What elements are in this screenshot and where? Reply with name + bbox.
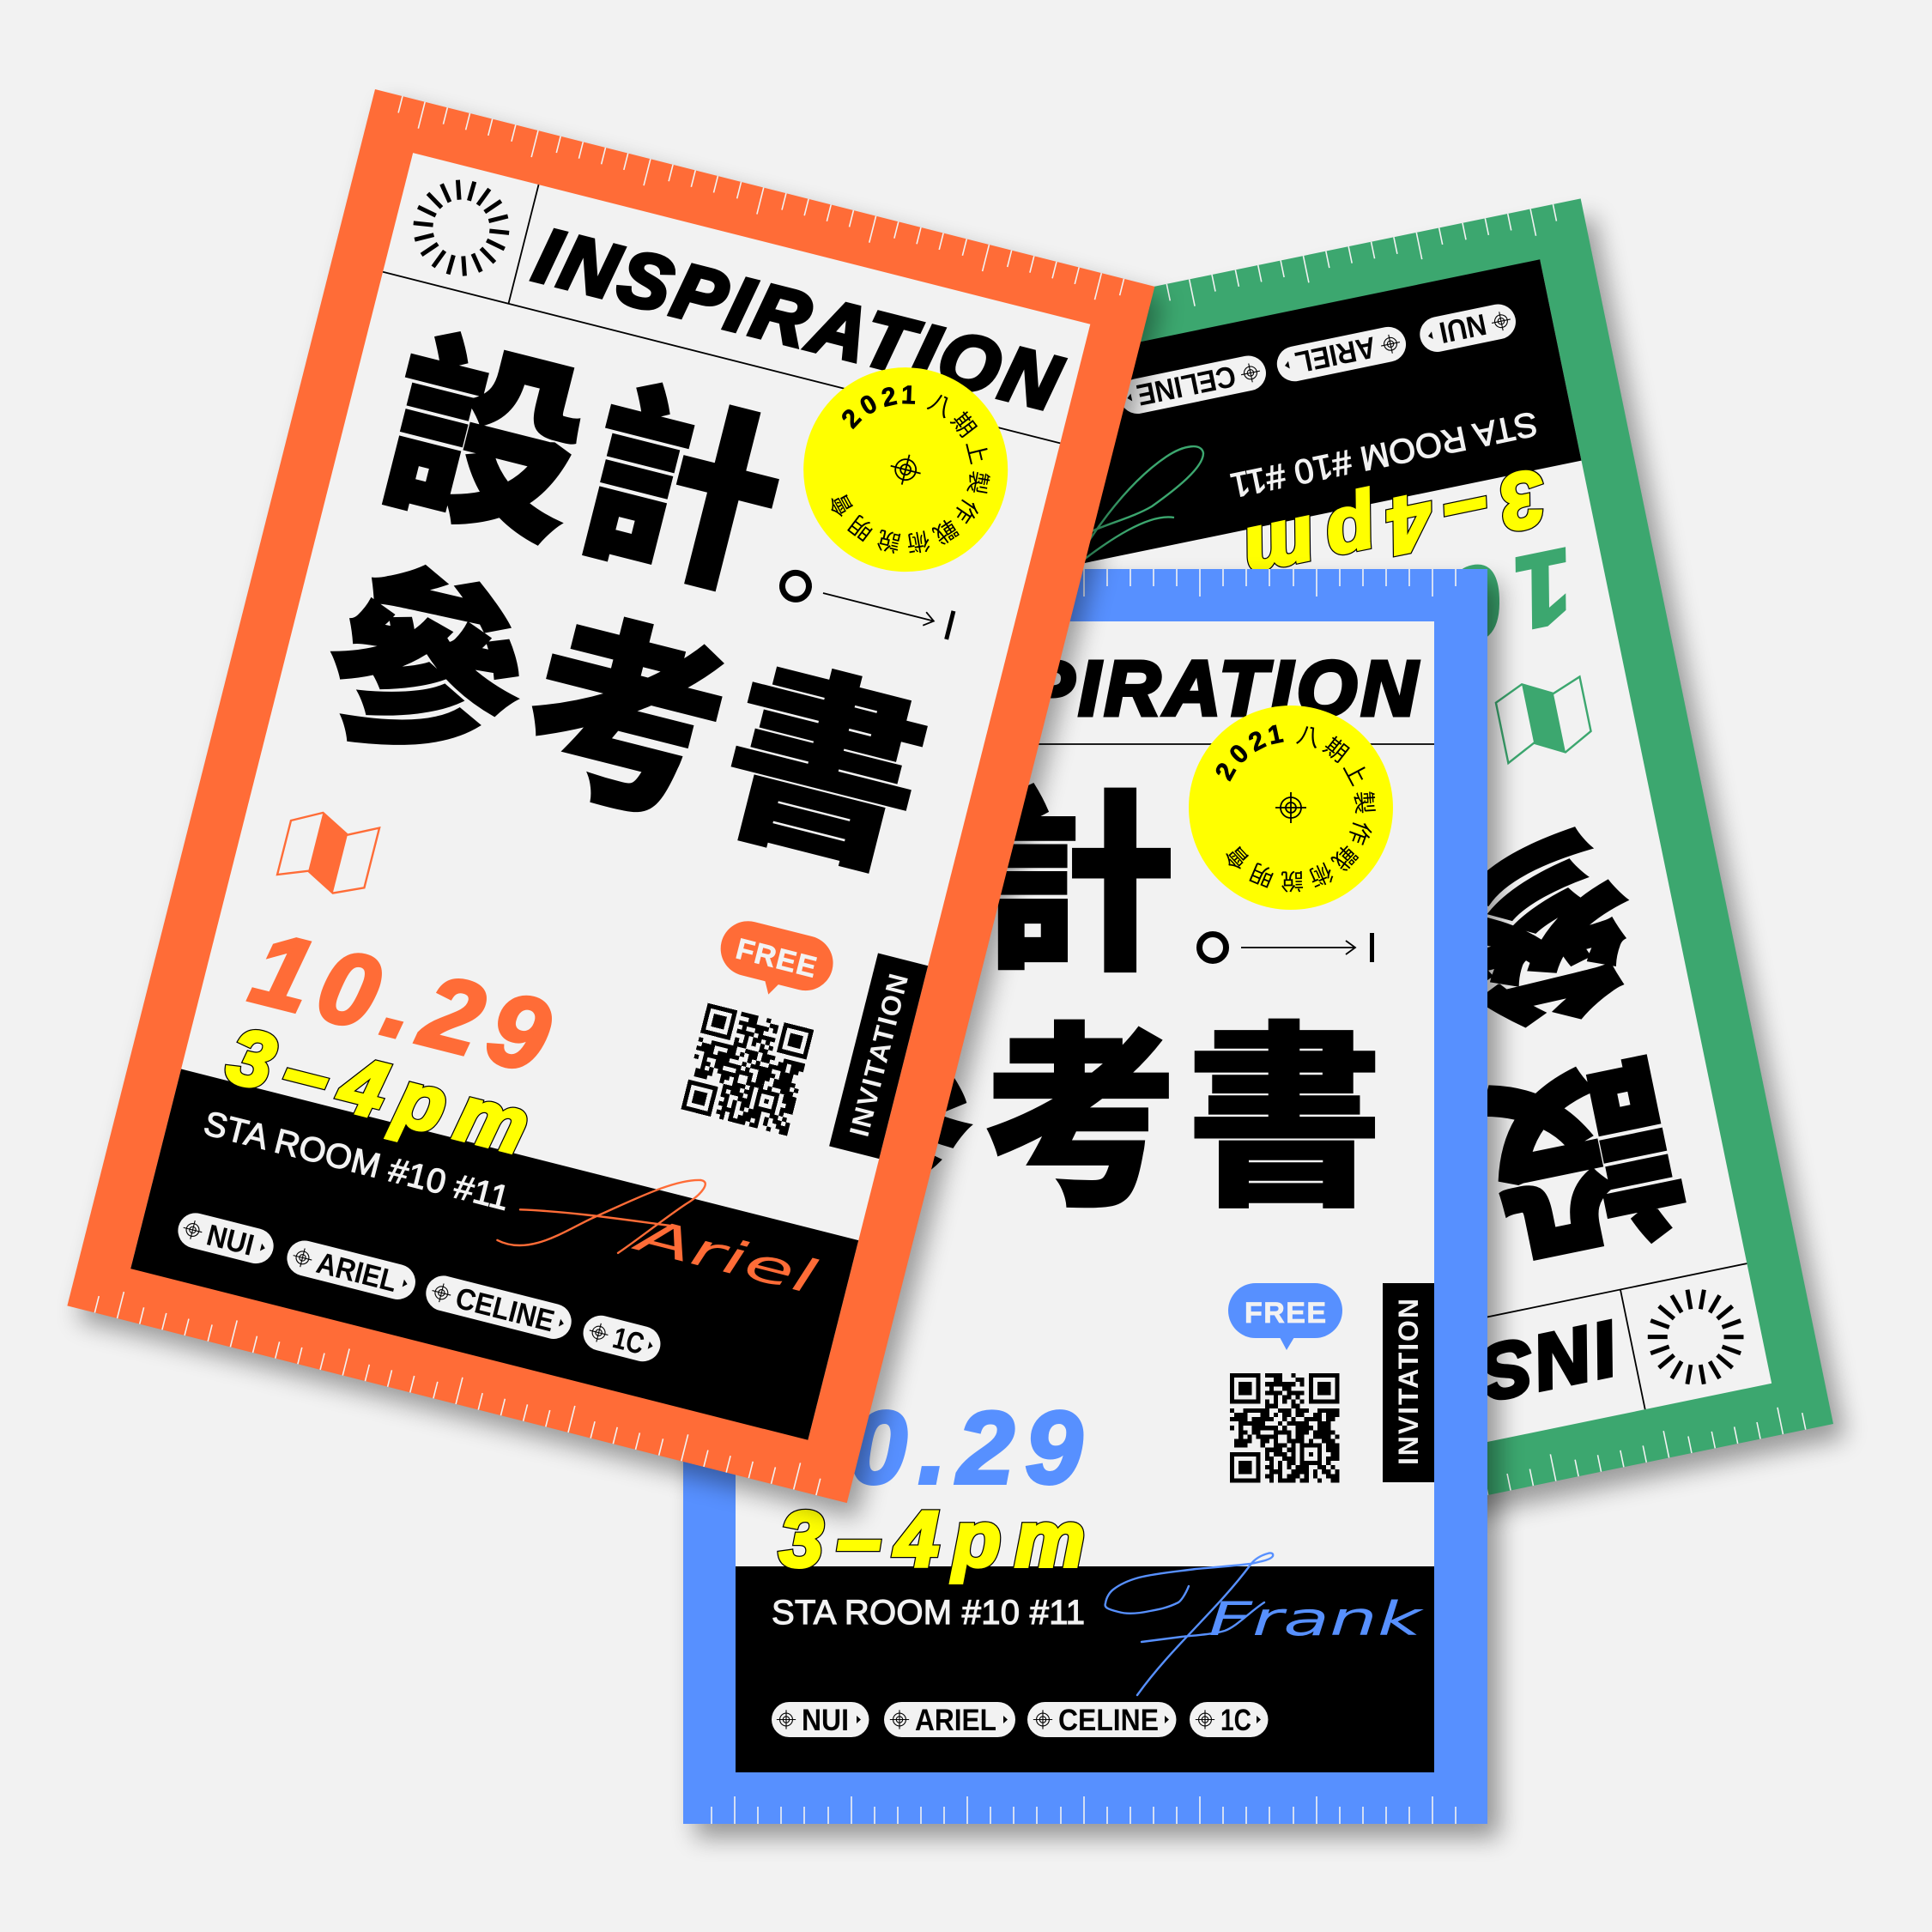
tag: NUI <box>1417 301 1519 355</box>
tag: 1C: 1C <box>609 1321 647 1361</box>
shadow: orange card <box>78 103 1163 1518</box>
badge: yellow circle <box>1189 706 1393 910</box>
badge: yellow circle: 會 <box>1216 839 1256 879</box>
tag: ARIEL <box>884 1702 1015 1737</box>
ruler ticks <box>712 569 1456 1824</box>
time: 3–4pm <box>1237 452 1553 600</box>
badge: yellow circle: 期 <box>945 404 985 443</box>
card frame <box>796 198 1833 1586</box>
heading: 參考書: 參考書 <box>1014 783 1663 1182</box>
badge: yellow circle: 說 <box>1281 866 1304 899</box>
inner panel <box>736 621 1434 1772</box>
green card (rotated, upside down) <box>796 198 1833 1586</box>
heading: 設計: 設計 <box>1263 1013 1710 1370</box>
tag: NUI <box>174 1209 277 1268</box>
tag: 1C <box>579 1311 664 1366</box>
invitation tab: INVITATION <box>1393 1299 1424 1465</box>
ruler ticks <box>94 96 1124 1495</box>
tag: ARIEL: ARIEL <box>313 1246 401 1299</box>
black info band <box>736 1566 1434 1772</box>
title: INSPIRATION <box>881 646 1419 732</box>
time: 3–4pm <box>779 1496 1085 1584</box>
badge: yellow circle: 上 <box>960 437 997 467</box>
badge: yellow circle: 作 <box>1341 817 1381 850</box>
tag: 1C <box>1027 385 1111 435</box>
room: STA ROOM #10 #11 <box>1227 404 1541 504</box>
heading: 設計: 設計 <box>778 726 1176 1009</box>
QR code <box>681 1005 814 1134</box>
badge: yellow circle: 1 <box>901 381 916 410</box>
badge: yellow circle: 明 <box>841 509 880 550</box>
tag: 1C: 1C <box>1044 391 1081 430</box>
title: INSPIRATION <box>526 213 1069 427</box>
badge: yellow circle: 術 <box>904 525 933 562</box>
free bubble <box>1228 1283 1342 1350</box>
tag: ARIEL: ARIEL <box>1293 330 1378 379</box>
header rule <box>383 153 1090 443</box>
tag: 1C: 1C <box>1220 1704 1251 1737</box>
shadow: blue card <box>695 583 1499 1838</box>
arrow: ring to bar <box>1200 933 1374 962</box>
signature: Frank: Frank <box>1208 1592 1425 1646</box>
badge: yellow circle: 2 <box>836 404 867 433</box>
badge: yellow circle: 期 <box>1317 728 1357 769</box>
invitation tab <box>1383 1283 1434 1482</box>
tag: NUI: NUI <box>802 1704 849 1737</box>
tag: CELINE: CELINE <box>1058 1704 1159 1737</box>
badge: yellow circle: 明 <box>1245 857 1279 897</box>
time: 3–4pm <box>220 1011 537 1172</box>
green signature flourish <box>1064 446 1203 584</box>
icon: map <box>781 1283 869 1359</box>
blue card <box>683 569 1487 1824</box>
card frame <box>683 569 1487 1824</box>
arrow: ring to bar <box>779 569 955 639</box>
room: STA ROOM #10 #11 <box>200 1105 513 1218</box>
header rule <box>1065 1263 1772 1524</box>
badge: yellow circle <box>782 346 1030 594</box>
badge: yellow circle: 八 <box>1293 716 1324 754</box>
time: 3–4pm <box>220 1011 537 1172</box>
signature: Ariel: Ariel <box>627 1207 821 1305</box>
time: 3–4pm <box>1237 452 1553 600</box>
room: STA ROOM #10 #11 <box>772 1594 1085 1632</box>
badge: yellow circle: 上 <box>1337 754 1378 790</box>
badge: yellow circle: 說 <box>874 524 904 561</box>
tag: 1C <box>1190 1702 1269 1737</box>
icon: sunburst <box>403 170 519 286</box>
badge: yellow circle: 戰 <box>1326 839 1366 879</box>
invitation tab <box>829 954 928 1159</box>
badge: yellow circle: 2 <box>1245 725 1270 757</box>
badge: yellow circle: 戰 <box>928 512 965 553</box>
heading: 參考書: 參考書 <box>300 493 957 916</box>
badge: yellow circle: 八 <box>923 384 960 424</box>
icon: sunburst <box>754 634 848 730</box>
tag: CELINE <box>1117 353 1269 417</box>
shadow: green card <box>807 216 1845 1601</box>
signature: Frank <box>1105 1553 1425 1695</box>
tag: NUI: NUI <box>203 1218 257 1263</box>
badge: yellow circle: 2 <box>879 382 899 413</box>
icon: sunburst <box>1639 1281 1752 1394</box>
header rule <box>736 621 1434 744</box>
tag: ARIEL <box>1274 324 1409 385</box>
inner panel <box>858 260 1772 1524</box>
heading: 參考書: 參考書 <box>776 961 1383 1245</box>
date: 10.29 <box>782 1390 1082 1505</box>
date: 10.29 <box>241 910 560 1095</box>
badge: yellow circle: 2 <box>1210 759 1242 784</box>
black info band <box>130 1069 858 1440</box>
free bubble <box>712 915 839 1008</box>
tag: NUI <box>772 1702 869 1737</box>
tag: ARIEL <box>283 1237 419 1303</box>
badge: yellow circle: 會 <box>820 488 860 524</box>
card frame <box>67 89 1154 1503</box>
ruler ticks <box>827 204 1806 1579</box>
inner panel <box>130 153 1090 1439</box>
tag: CELINE: CELINE <box>452 1281 558 1338</box>
badge: yellow circle: 1 <box>1265 720 1286 750</box>
signature: Ariel <box>497 1136 832 1319</box>
tag: CELINE: CELINE <box>1134 359 1239 412</box>
badge: yellow circle: 術 <box>1304 857 1339 896</box>
QR code <box>1230 1376 1339 1481</box>
tag: CELINE <box>422 1272 575 1342</box>
badge: yellow circle: 0 <box>1224 739 1254 769</box>
tag: ARIEL: ARIEL <box>915 1704 996 1737</box>
black info band <box>857 259 1581 602</box>
badge: yellow circle: 製 <box>961 469 998 497</box>
orange card (rotated) <box>67 89 1154 1503</box>
free bubble: FREE <box>1245 1297 1326 1329</box>
badge: yellow circle: 0 <box>856 390 882 421</box>
badge: yellow circle: 作 <box>948 493 988 530</box>
badge: yellow circle: 製 <box>1348 790 1384 815</box>
heading: 設計: 設計 <box>359 264 815 637</box>
time: 3–4pm <box>779 1496 1085 1584</box>
invitation tab: INVITATION <box>844 971 914 1140</box>
icon: map <box>1493 673 1594 764</box>
icon: map <box>276 806 379 900</box>
free bubble: FREE <box>733 933 820 984</box>
title: INSPIRATION <box>1082 1305 1625 1497</box>
tag: NUI: NUI <box>1437 307 1489 349</box>
date: 10.29 <box>1255 527 1584 701</box>
